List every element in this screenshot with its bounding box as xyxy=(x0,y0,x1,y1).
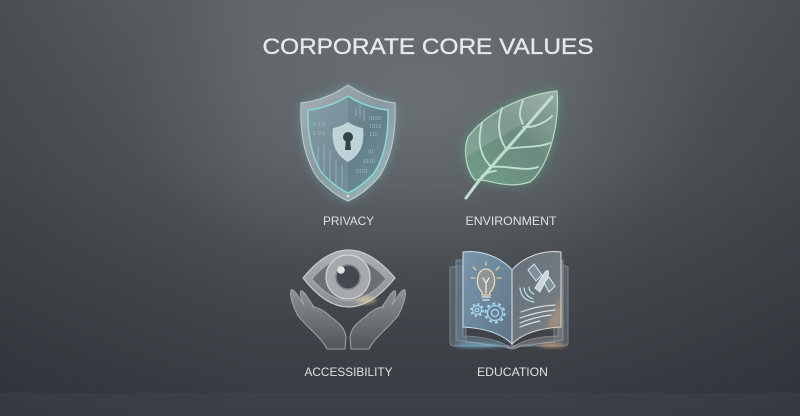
label: environment: ENVIRONMENT xyxy=(466,216,556,228)
left page xyxy=(463,252,512,344)
label: accessibility: ACCESSIBILITY xyxy=(304,367,393,379)
icon: leaf xyxy=(465,91,557,198)
satellite xyxy=(528,264,555,292)
binary pattern xyxy=(313,116,381,175)
label: education: EDUCATION xyxy=(477,367,548,379)
binary pattern: 1010 xyxy=(369,124,381,130)
binary pattern: 0100 xyxy=(369,116,381,122)
eye xyxy=(303,250,395,307)
leaf veins xyxy=(466,97,552,198)
icon: shield with keyhole xyxy=(301,85,395,201)
binary pattern: 0110 xyxy=(363,159,375,165)
binary pattern: 01 xyxy=(368,149,374,155)
icon: eye in hands xyxy=(290,250,406,349)
left hand xyxy=(290,290,346,349)
title: CORPORATE CORE VALUES xyxy=(262,34,594,59)
icon: open book xyxy=(450,252,568,349)
lightbulb xyxy=(471,262,501,300)
signal arcs xyxy=(520,287,534,302)
binary pattern: 0 1 0 xyxy=(313,122,325,128)
label: privacy: PRIVACY xyxy=(323,216,374,228)
binary pattern: 0101 xyxy=(356,169,368,175)
binary pattern: 1 0 1 xyxy=(313,131,325,137)
gears xyxy=(471,304,504,322)
text lines on page xyxy=(520,305,555,327)
right hand xyxy=(350,290,406,349)
binary pattern: 110 xyxy=(369,132,378,138)
right page xyxy=(512,252,561,344)
keyhole badge xyxy=(333,122,363,162)
